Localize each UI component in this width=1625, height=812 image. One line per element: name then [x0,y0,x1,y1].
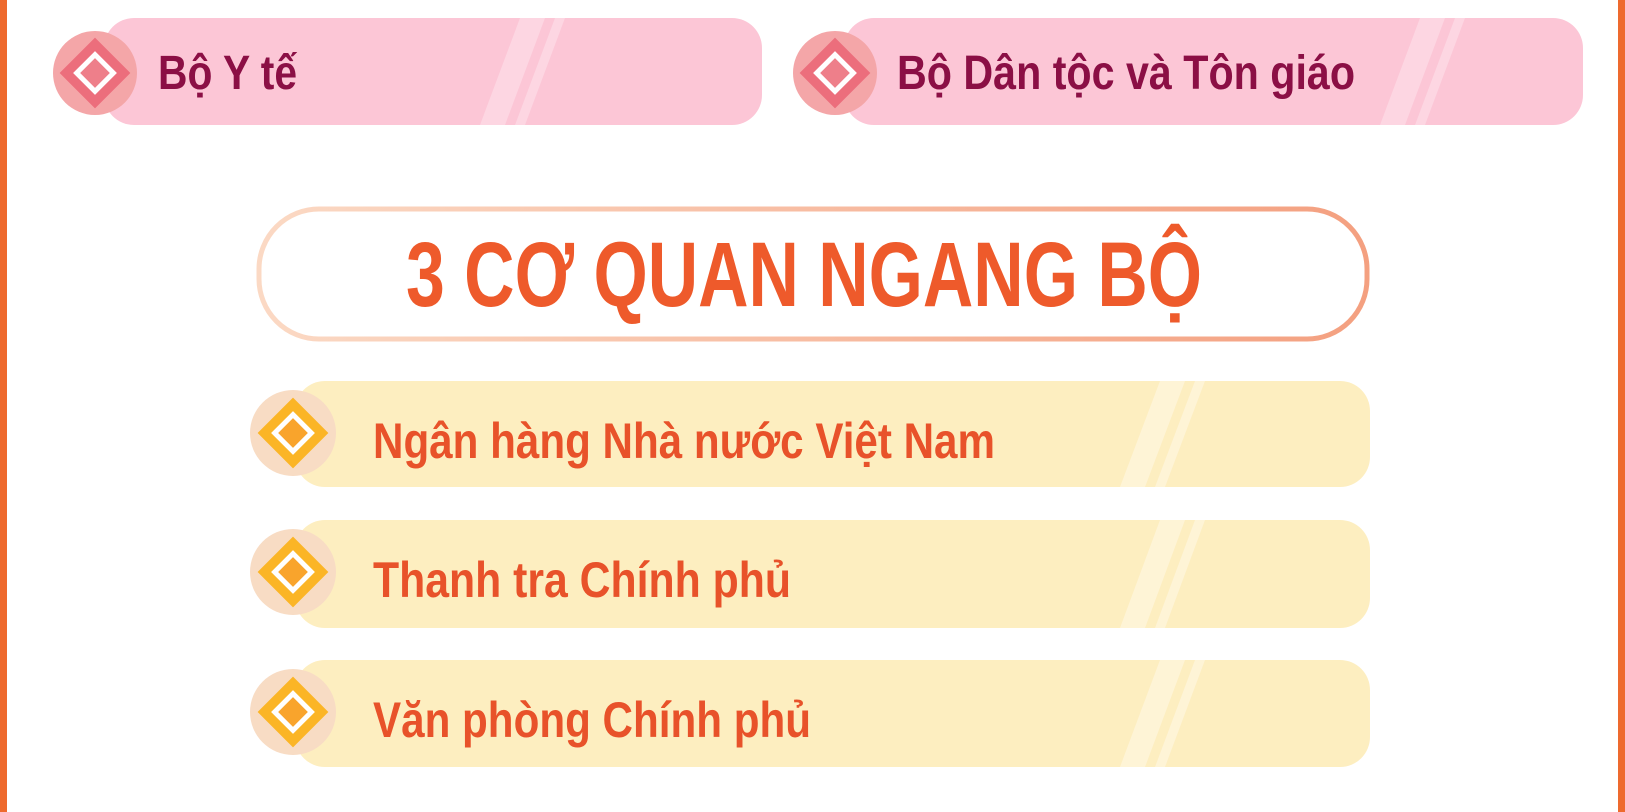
panel: Bộ Y tế [53,18,762,125]
panel: Bộ Dân tộc và Tôn giáo [793,18,1583,125]
text: Thanh tra Chính phủ [373,552,791,608]
panel: Ngân hàng Nhà nước Việt Nam [250,381,1370,487]
title box [259,209,1367,339]
panel: Văn phòng Chính phủ [250,660,1370,767]
icon: pink diamond [793,31,877,115]
text: Bộ Y tế: Bộ Y tế [158,47,297,100]
icon: pink diamond [53,31,137,115]
title: 3 CƠ QUAN NGANG BỘ [406,223,1202,326]
icon: yellow diamond [250,390,336,476]
icon: yellow diamond [250,669,336,755]
text: Ngân hàng Nhà nước Việt Nam [373,413,995,469]
text: Bộ Dân tộc và Tôn giáo: Bộ Dân tộc và Tôn giáo [897,47,1355,100]
panel: Thanh tra Chính phủ [250,520,1370,628]
text: Văn phòng Chính phủ [373,692,811,748]
icon: yellow diamond [250,529,336,615]
